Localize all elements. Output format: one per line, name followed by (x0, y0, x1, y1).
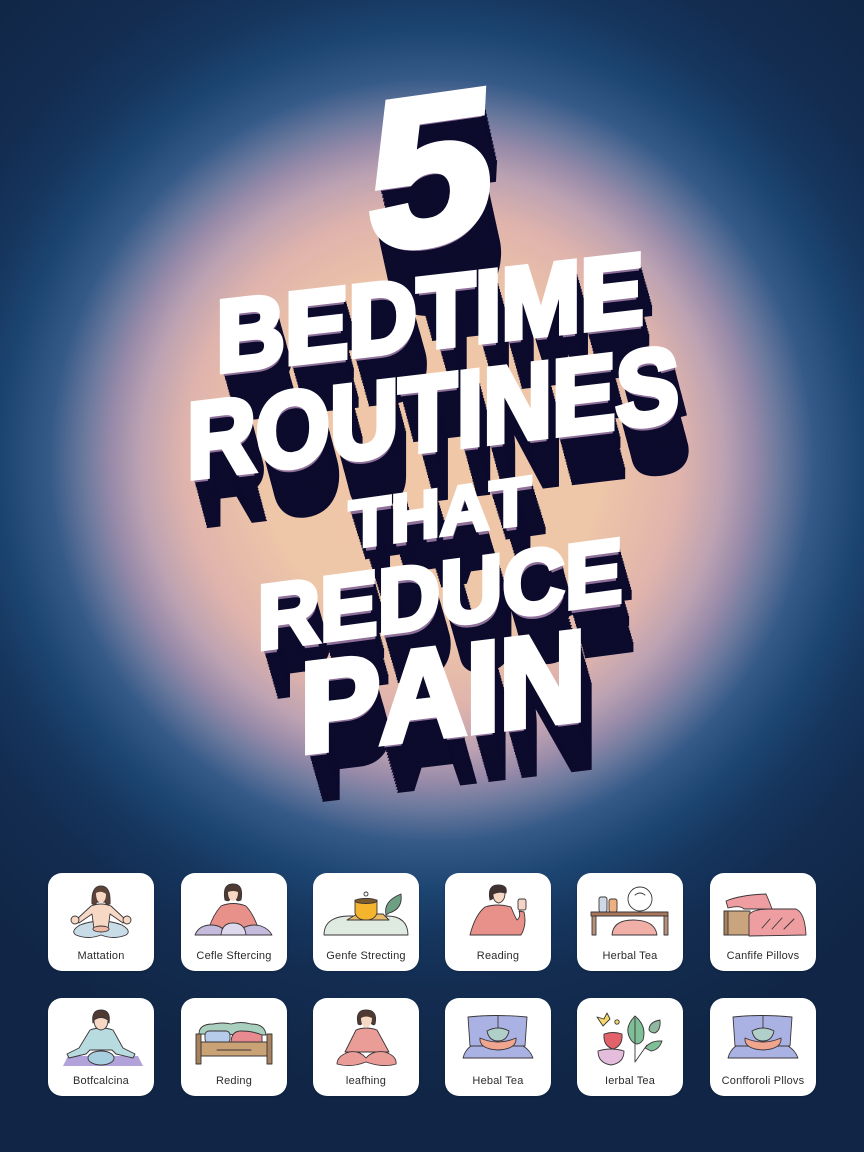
title line: ROUTINES: ROUTINES (187, 324, 679, 501)
title line: PAIN: PAIN (300, 603, 586, 780)
icon: seated meditation (70, 886, 132, 938)
label: Canfife Pillovs (727, 950, 799, 962)
label: Ierbal Tea (605, 1075, 655, 1087)
title line: REDUCE: REDUCE (257, 520, 623, 670)
icon: bedside table with bottles (590, 886, 668, 936)
card: herbs (577, 998, 683, 1096)
label: leafhing (346, 1075, 386, 1087)
card: bed (710, 873, 816, 971)
title line: THAT: THAT (349, 463, 531, 563)
card: cross-legged (313, 998, 419, 1096)
label: Cefle Sftercing (196, 950, 272, 962)
title (187, 42, 689, 802)
title line: 5: 5 (363, 42, 499, 297)
card: pillow (445, 998, 551, 1096)
icon: cross-legged person (336, 1010, 396, 1066)
icon: neck pillow on bed (728, 1015, 798, 1058)
card: bedside table (577, 873, 683, 971)
icon: seated person on mat (63, 1010, 143, 1066)
card: tea on hill (313, 873, 419, 971)
label: Botfcalcina (73, 1075, 129, 1087)
label: Confforoli Pllovs (722, 1075, 804, 1087)
card: reading (445, 873, 551, 971)
label: Genfe Strecting (326, 950, 406, 962)
label: Reading (477, 950, 519, 962)
icon: tea cup and leaf (324, 892, 408, 936)
icon: neck pillow on bed (462, 1015, 534, 1058)
label: Mattation (77, 950, 125, 962)
icon: bed with coloured pillows (196, 1022, 272, 1064)
card: stretching seated (48, 998, 154, 1096)
card: comfort pillows (710, 998, 816, 1096)
label: Herbal Tea (602, 950, 658, 962)
icon: person raising book (470, 884, 526, 936)
card: stretching (181, 873, 287, 971)
label: Reding (216, 1075, 252, 1087)
icon: herbs and bowl (596, 1012, 662, 1066)
icon: bed with pink blanket (724, 894, 806, 936)
title line: BEDTIME: BEDTIME (216, 233, 644, 394)
card: meditation (48, 873, 154, 971)
card: bed with pillows (181, 998, 287, 1096)
panel: routine cards (48, 873, 816, 1096)
icon: person with cushions (194, 884, 272, 936)
label: Hebal Tea (472, 1075, 524, 1087)
